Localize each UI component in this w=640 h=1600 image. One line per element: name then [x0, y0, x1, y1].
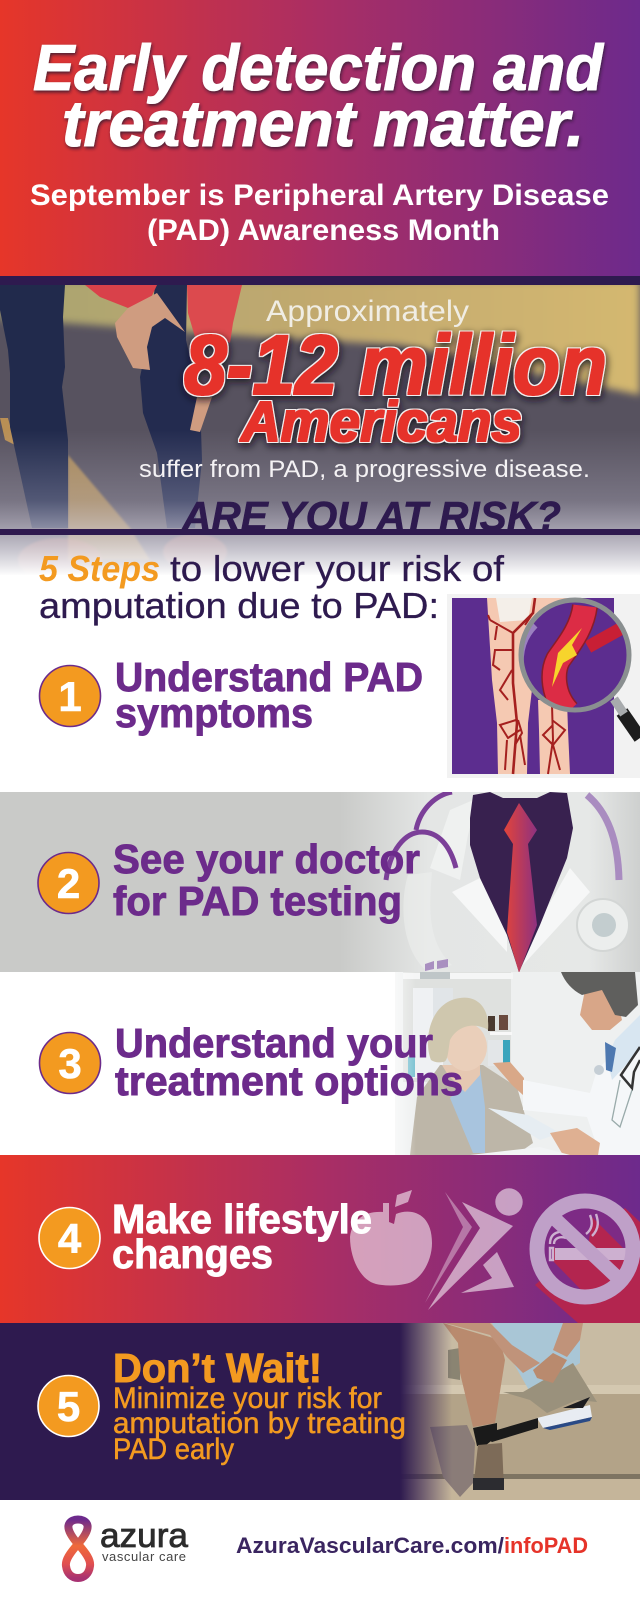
intro heading: to lower your risk of — [170, 548, 505, 589]
illustration: leg arteries with magnifier — [447, 594, 640, 778]
intro heading — [39, 548, 505, 626]
title: Early detection and — [33, 31, 604, 104]
website url: infoPAD — [504, 1533, 588, 1558]
step 5 body: Minimize your risk for — [113, 1382, 382, 1415]
panel: step 4 — [0, 1155, 640, 1330]
panel: road photo with statistic — [0, 280, 640, 585]
subtitle: (PAD) Awareness Month — [147, 214, 500, 247]
number badge 3 — [40, 1032, 100, 1094]
number badge 4 — [39, 1208, 100, 1268]
website url: AzuraVascularCare.com/ — [236, 1533, 504, 1558]
text: suffer from PAD: suffer from PAD, a progressive disease. — [139, 456, 590, 483]
icon: apple — [350, 1190, 432, 1286]
number badge 1 — [40, 666, 100, 726]
step 1 heading — [115, 654, 423, 736]
step 1 heading: Understand PAD — [115, 654, 423, 700]
panel: step 2 — [0, 792, 640, 973]
step 3 heading — [115, 1020, 463, 1104]
divider bar top — [0, 276, 640, 285]
icon: no smoking — [535, 1201, 640, 1330]
text: Approximately: Approximately — [266, 295, 469, 328]
header banner — [0, 0, 640, 276]
number badge 5: 5 — [57, 1383, 80, 1430]
logo: azura vascular care — [66, 1517, 188, 1578]
icon: runner — [425, 1188, 523, 1310]
number badge 3: 3 — [58, 1040, 82, 1087]
step 5 heading: Don’t Wait! — [113, 1345, 322, 1391]
photo: doctor with patient — [380, 972, 640, 1155]
step 2 heading — [113, 836, 420, 924]
statistic: 8-12 million: 8-12 million — [184, 318, 607, 412]
panel: step 1 — [39, 548, 640, 778]
step 5 body — [113, 1382, 406, 1466]
statistic: Americans: Americans — [239, 390, 522, 454]
subtitle — [30, 179, 609, 247]
panel: step 5 — [0, 1323, 640, 1500]
illustration: doctor coat with stethoscope — [386, 792, 629, 973]
photo: seated man with prosthetic leg — [400, 1323, 640, 1500]
number badge 2: 2 — [57, 860, 80, 907]
step 5 body: PAD early — [113, 1433, 234, 1466]
number badge 4: 4 — [58, 1215, 82, 1262]
title — [33, 31, 604, 160]
divider bar lower — [0, 529, 640, 535]
step 4 heading — [112, 1196, 372, 1277]
panel: step 3 — [0, 972, 640, 1155]
number badge 2 — [38, 852, 99, 914]
logo: azura vascular care: azura — [100, 1517, 188, 1555]
step 1 heading: symptoms — [115, 690, 313, 736]
step 3 heading: treatment options — [115, 1058, 463, 1104]
text: are you at risk: ARE YOU AT RISK? — [181, 493, 561, 539]
subtitle: September is Peripheral Artery Disease — [30, 179, 609, 212]
step 4 heading: Make lifestyle — [112, 1196, 372, 1242]
step 4 heading: changes — [112, 1231, 273, 1277]
intro heading: amputation due to PAD: — [39, 585, 439, 626]
footer — [0, 1500, 640, 1600]
photo: runner holding leg on road — [0, 280, 640, 585]
step 2 heading: See your doctor — [113, 836, 420, 882]
intro heading: 5 Steps — [39, 548, 160, 589]
number badge 5 — [38, 1376, 99, 1436]
title: treatment matter. — [62, 87, 584, 160]
logo: azura vascular care: vascular care — [102, 1549, 186, 1564]
step 5 body: amputation by treating — [113, 1407, 406, 1440]
step 3 heading: Understand your — [115, 1020, 433, 1066]
number badge 1: 1 — [58, 673, 82, 720]
step 2 heading: for PAD testing — [113, 878, 402, 924]
